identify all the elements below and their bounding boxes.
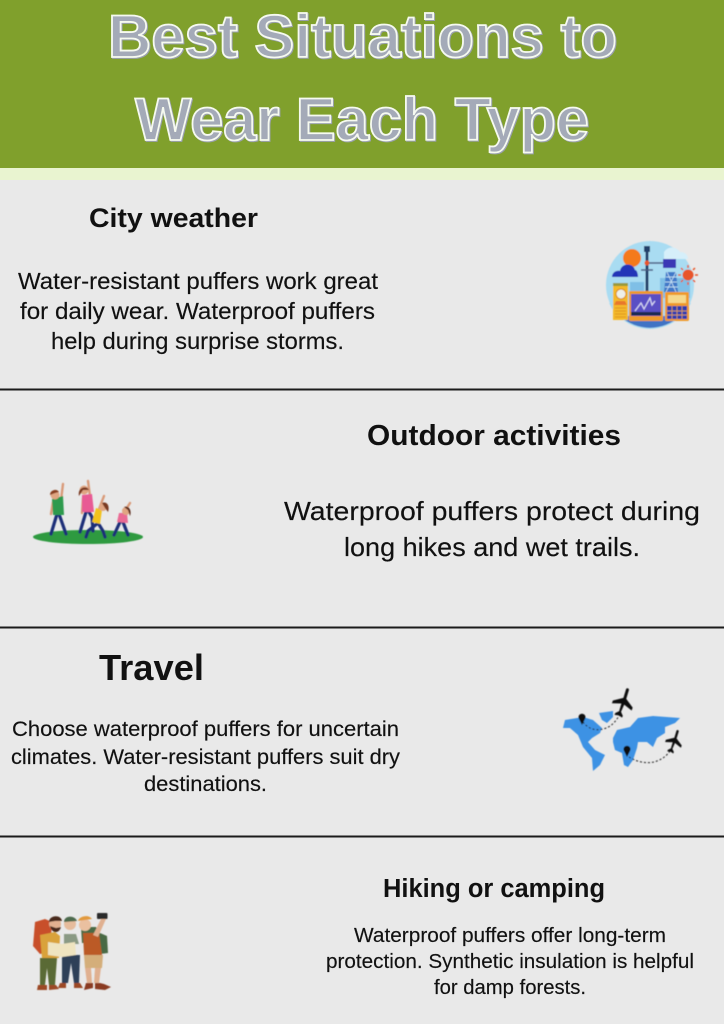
text: travel body: climates. Water-resistant puffers suit dry [11, 745, 400, 769]
panel: city weather [18, 203, 698, 354]
text: outdoor activities body: Waterproof puffers protect during [284, 496, 700, 526]
text: travel body: destinations. [144, 772, 267, 796]
text: travel body [11, 717, 400, 796]
text: city weather body: help during surprise storms. [51, 328, 344, 354]
header banner [0, 0, 724, 180]
text: hiking or camping body: for damp forests. [434, 977, 586, 999]
icon: group of hikers [33, 913, 111, 990]
text: hiking or camping body: protection. Synthetic insulation is helpful [326, 951, 694, 973]
heading: city weather: City weather [89, 203, 259, 233]
text: outdoor activities body [284, 496, 700, 562]
panel: travel [11, 647, 686, 796]
text: outdoor activities body: long hikes and wet trails. [344, 532, 640, 562]
text: travel body: Choose waterproof puffers for uncertain [12, 717, 399, 741]
panel: hiking or camping [33, 875, 694, 999]
heading: travel: Travel [99, 647, 204, 688]
text: city weather body: for daily wear. Waterproof puffers [20, 298, 375, 324]
heading: hiking or camping: Hiking or camping [383, 875, 605, 903]
text: hiking or camping body: Waterproof puffers offer long-term [354, 925, 666, 947]
text: city weather body [18, 268, 379, 354]
icon: world map with planes [563, 685, 686, 771]
icon: weather station [606, 241, 698, 329]
text: city weather body: Water-resistant puffers work great [18, 268, 379, 294]
icon: family stretching on grass [33, 481, 143, 544]
title [108, 3, 617, 153]
text: hiking or camping body [326, 925, 694, 999]
title: Wear Each Type [135, 86, 589, 153]
heading: outdoor activities: Outdoor activities [367, 420, 621, 452]
panel: outdoor activities [33, 420, 700, 562]
title: Best Situations to [108, 3, 617, 70]
